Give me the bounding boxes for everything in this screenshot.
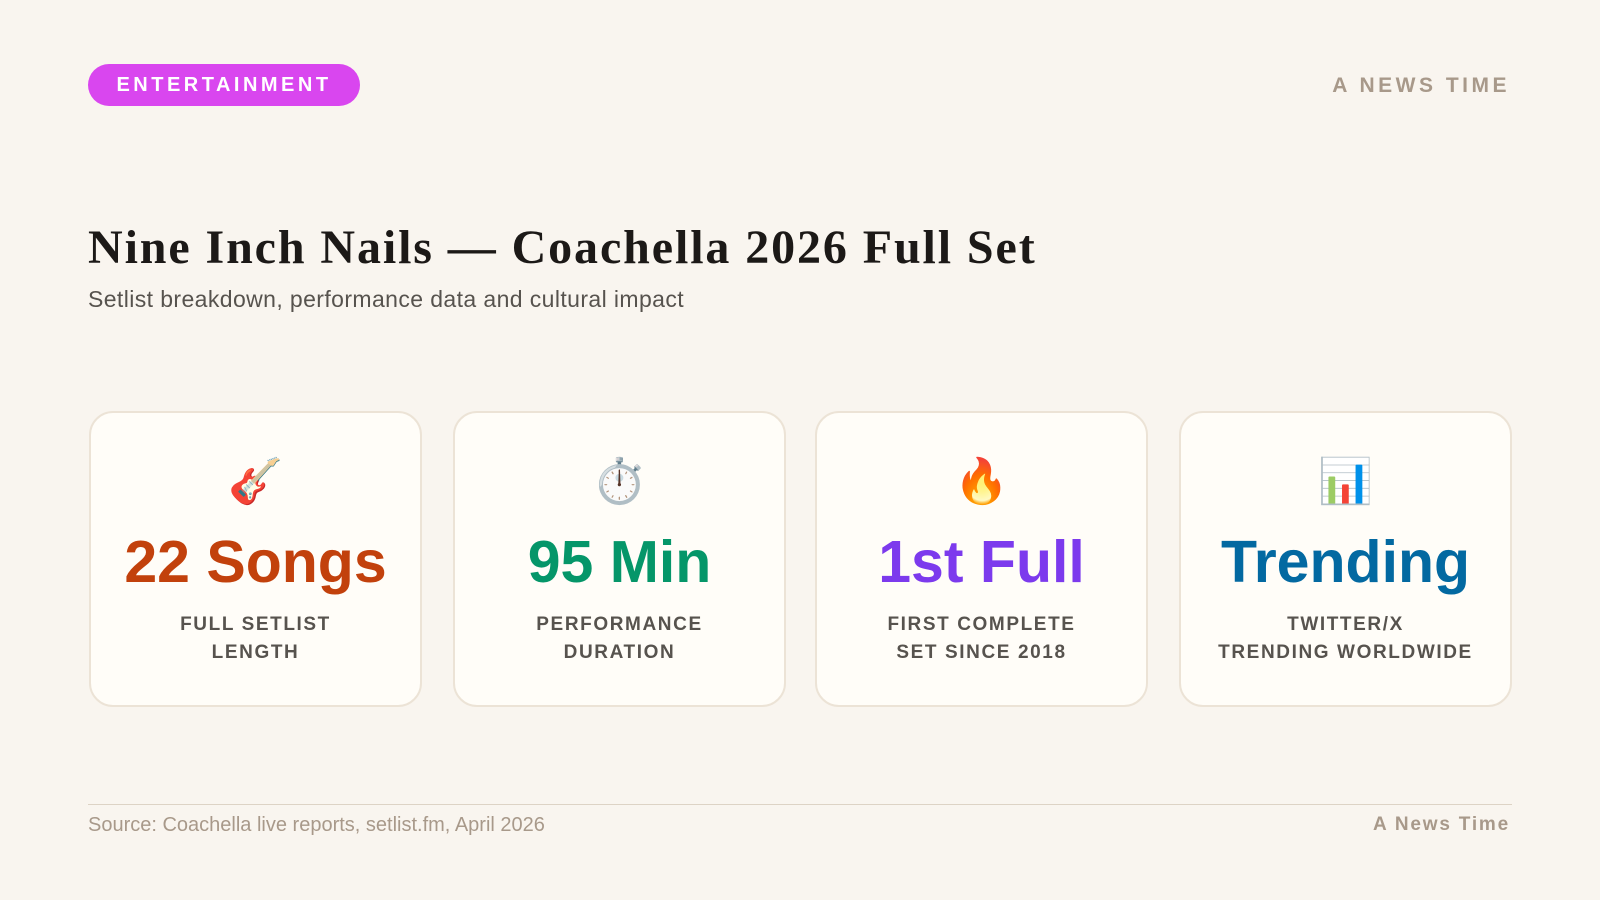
label: setlist: FULL SETLIST <box>180 614 331 635</box>
brand top right: A NEWS TIME <box>1332 74 1510 97</box>
icon: fire: 🔥 <box>954 455 1009 507</box>
label: first complete <box>887 614 1076 663</box>
label: duration: PERFORMANCE <box>536 614 703 635</box>
stat: trending: Trending <box>1221 529 1470 595</box>
card: first full <box>815 411 1148 707</box>
label: twitter <box>1218 614 1473 663</box>
icon: guitar: 🎸 <box>228 455 283 507</box>
card: duration <box>453 411 786 707</box>
title: Nine Inch Nails — Coachella 2026 Full Set <box>88 221 1037 274</box>
label: twitter: TWITTER/X <box>1287 614 1404 635</box>
card: songs <box>89 411 422 707</box>
subtitle: Setlist breakdown, performance data and cultural impact <box>88 286 684 312</box>
icon: stopwatch: ⏱️ <box>592 455 647 507</box>
label: first complete: FIRST COMPLETE <box>887 614 1076 635</box>
label: setlist: LENGTH <box>212 642 299 663</box>
label: duration: DURATION <box>564 642 675 663</box>
footer brand: A News Time <box>1373 814 1510 835</box>
card: trending <box>1179 411 1512 707</box>
stat: 22 songs: 22 Songs <box>124 529 387 595</box>
icon: chart: 📊 <box>1318 455 1373 507</box>
category pill <box>88 64 360 106</box>
stat: 95 min: 95 Min <box>528 529 711 595</box>
label: duration <box>536 614 703 663</box>
stat: 1st full: 1st Full <box>878 529 1085 595</box>
label: first complete: SET SINCE 2018 <box>896 642 1067 663</box>
source: Source: Coachella live reports, setlist.fm, April 2026 <box>88 814 545 836</box>
label: setlist <box>180 614 331 663</box>
category pill: ENTERTAINMENT <box>116 74 332 96</box>
label: twitter: TRENDING WORLDWIDE <box>1218 642 1473 663</box>
